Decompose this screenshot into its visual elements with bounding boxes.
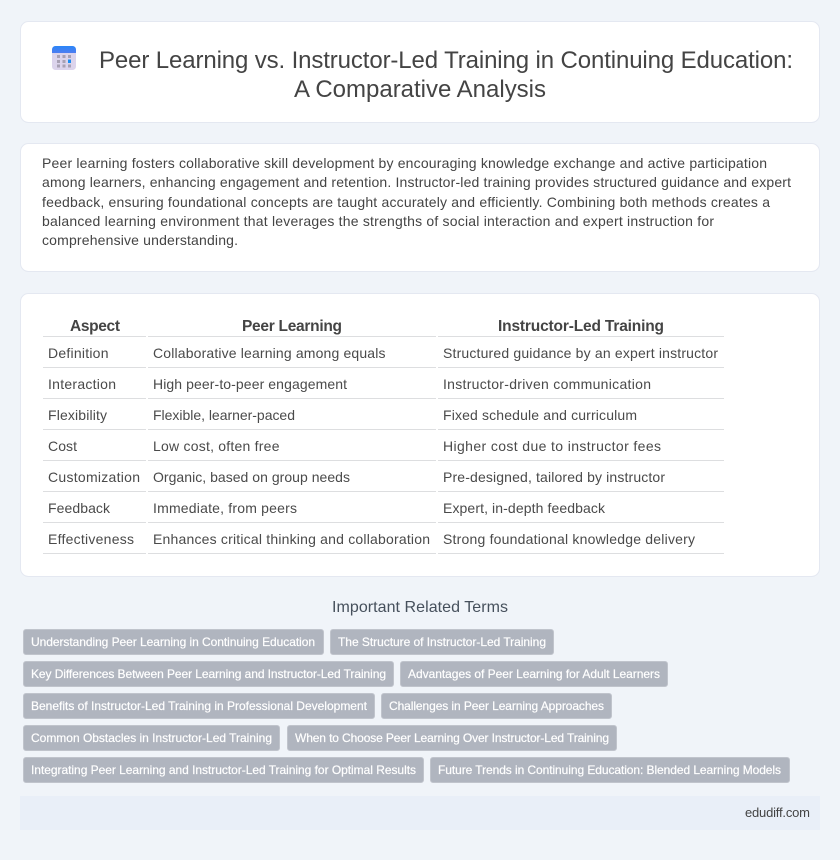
row: flexibility: Flexibility [48,407,107,423]
tag [430,758,790,782]
summary text: feedback, ensuring foundational concepts are taught accurately and efficiently. Combining both methods creates a [42,194,770,210]
row: cost: Higher cost due to instructor fees [443,438,661,454]
panel: comparison table [20,294,820,576]
tag [24,758,424,782]
table header row: Aspect [70,318,120,335]
table header row: Peer Learning [242,318,342,335]
table header row [70,318,664,335]
row: effectiveness: Enhances critical thinking and collaboration [153,531,430,547]
tag: Key Differences Between Peer Learning and Instructor-Led Training [31,667,386,681]
row: customization: Customization [48,469,140,485]
row: cost: Cost [48,438,77,454]
row: interaction [48,376,651,392]
panel: summary paragraph [20,144,820,272]
tag [24,662,394,686]
row: feedback: Immediate, from peers [153,500,297,516]
title: Peer Learning vs. Instructor-Led Training in Continuing Education: [99,47,793,74]
row: flexibility [48,407,637,423]
summary text: among learners, enhancing engagement and retention. Instructor-led training provides structured guidance and expert [42,174,791,190]
row: definition [48,345,718,361]
row: feedback [48,500,606,516]
row: customization: Pre-designed, tailored by instructor [443,469,665,485]
tag: Integrating Peer Learning and Instructor-Led Training for Optimal Results [31,763,416,777]
tag: Challenges in Peer Learning Approaches [389,699,604,713]
row: feedback: Feedback [48,500,111,516]
row: definition: Definition [48,345,108,361]
row: customization [48,469,665,485]
icon: calendar [52,46,76,70]
summary text: comprehensive understanding. [42,232,238,248]
tag: The Structure of Instructor-Led Training [338,635,546,649]
tag: Understanding Peer Learning in Continuing Education [31,635,315,649]
summary text [42,155,791,248]
tag [330,630,554,654]
tag: Advantages of Peer Learning for Adult Learners [408,667,660,681]
tag [24,694,374,718]
summary text: balanced learning environment that leverages the strengths of social interaction and expert instruction for [42,213,714,229]
row: definition: Collaborative learning among equals [153,345,386,361]
tag [382,694,612,718]
row: effectiveness [48,531,695,547]
row: feedback: Expert, in-depth feedback [443,500,606,516]
footer [20,796,820,830]
row: cost: Low cost, often free [153,438,280,454]
title [99,47,793,103]
row: interaction: High peer-to-peer engagement [153,376,347,392]
related term tags [24,630,790,782]
tag [400,662,668,686]
row: cost [48,438,661,454]
footer: edudiff.com [745,805,810,820]
panel: header [20,22,820,122]
tag [288,726,616,750]
row: effectiveness: Strong foundational knowledge delivery [443,531,695,547]
row: definition: Structured guidance by an expert instructor [443,345,718,361]
row: interaction: Interaction [48,376,116,392]
row: flexibility: Flexible, learner-paced [153,407,295,423]
tag: When to Choose Peer Learning Over Instructor-Led Training [295,731,609,745]
row: effectiveness: Effectiveness [48,531,134,547]
tag: Common Obstacles in Instructor-Led Training [31,731,272,745]
title: A Comparative Analysis [294,76,546,103]
tag [24,630,324,654]
tag: Future Trends in Continuing Education: Blended Learning Models [438,763,781,777]
row: flexibility: Fixed schedule and curriculum [443,407,637,423]
row: customization: Organic, based on group needs [153,469,350,485]
heading: important related terms: Important Related Terms [332,599,508,616]
summary text: Peer learning fosters collaborative skill development by encouraging knowledge exchange and active participation [42,155,767,171]
row: interaction: Instructor-driven communication [443,376,651,392]
table header row: Instructor-Led Training [498,318,664,335]
tag [24,726,280,750]
tag: Benefits of Instructor-Led Training in Professional Development [31,699,368,713]
